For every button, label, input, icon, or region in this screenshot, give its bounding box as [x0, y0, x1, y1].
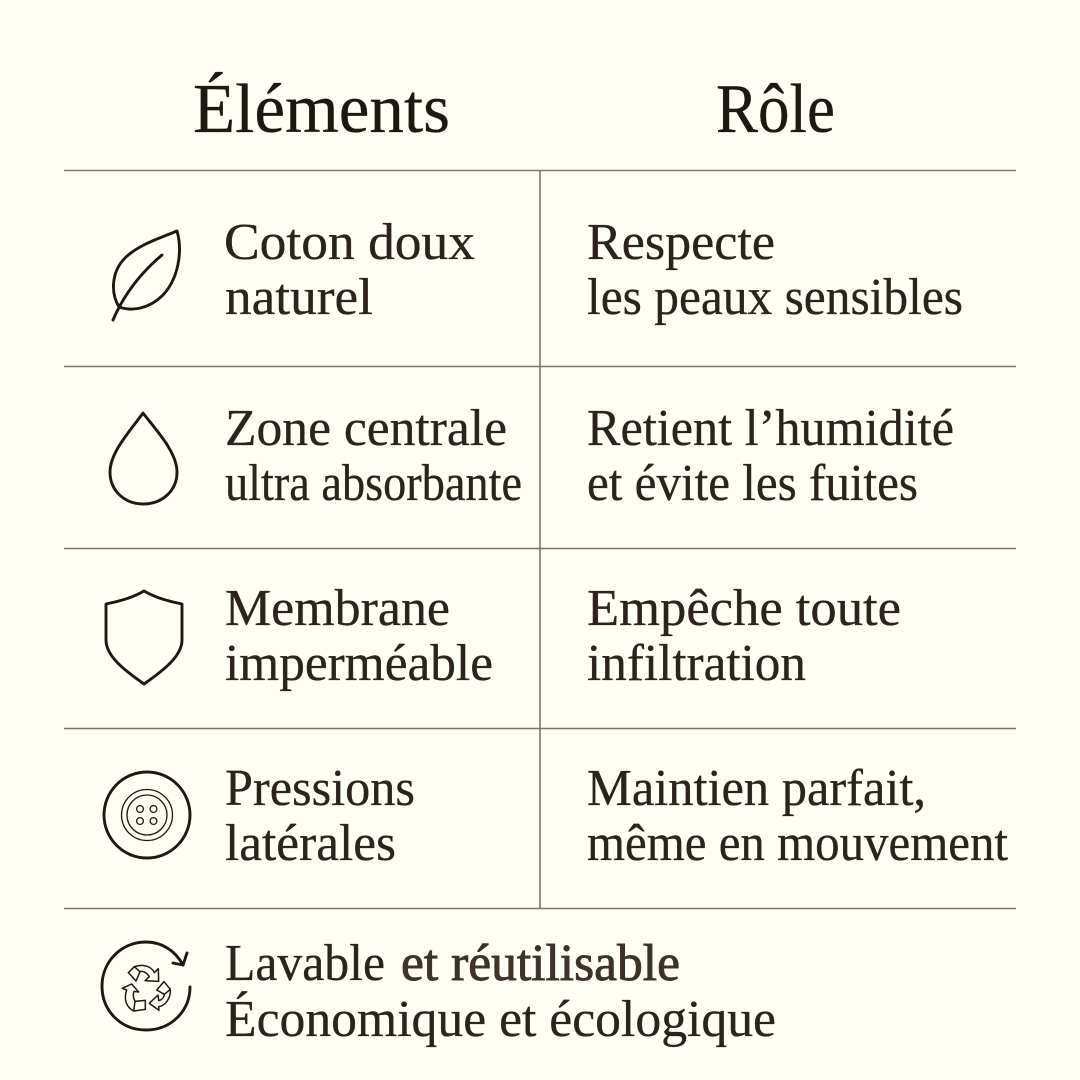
icon: drop — [110, 413, 177, 504]
role: peaux — [587, 214, 963, 326]
icon: recycle — [102, 942, 190, 1030]
element: coton — [224, 214, 475, 326]
element: membrane: imperméable — [225, 635, 493, 692]
footer text — [225, 935, 776, 1048]
role: peaux: les peaux sensibles — [587, 269, 963, 326]
role: infiltration — [587, 580, 901, 692]
role: maintien: même en mouvement — [587, 815, 1009, 872]
element: pressions — [225, 760, 415, 872]
element: coton: Coton doux — [224, 214, 475, 271]
icon: shield — [106, 591, 182, 684]
element: membrane: Membrane — [225, 580, 450, 637]
footer text: Économique et écologique — [225, 990, 776, 1048]
element: pressions: latérales — [225, 815, 396, 872]
heading: Rôle: Rôle — [716, 71, 835, 148]
element: pressions: Pressions — [225, 760, 415, 817]
element: coton: naturel — [225, 269, 373, 326]
role: infiltration: infiltration — [587, 635, 806, 692]
role: maintien — [587, 760, 1009, 872]
element: membrane — [225, 580, 493, 692]
element: zone centrale: ultra absorbante — [225, 455, 522, 512]
element: zone centrale — [225, 400, 522, 512]
icon: button — [104, 772, 190, 858]
role: humidité — [587, 400, 954, 512]
footer text: Lavable — [225, 935, 385, 992]
icon: leaf — [113, 231, 179, 320]
role: humidité: et évite les fuites — [587, 455, 918, 512]
role: infiltration: Empêche toute — [587, 580, 901, 637]
role: maintien: Maintien parfait, — [587, 760, 926, 817]
footer text: et réutilisable — [401, 935, 680, 992]
role: peaux: Respecte — [587, 214, 775, 271]
element: zone centrale: Zone centrale — [225, 400, 507, 457]
heading: Éléments: Éléments — [193, 71, 450, 148]
role: humidité: Retient l’humidité — [587, 400, 954, 457]
